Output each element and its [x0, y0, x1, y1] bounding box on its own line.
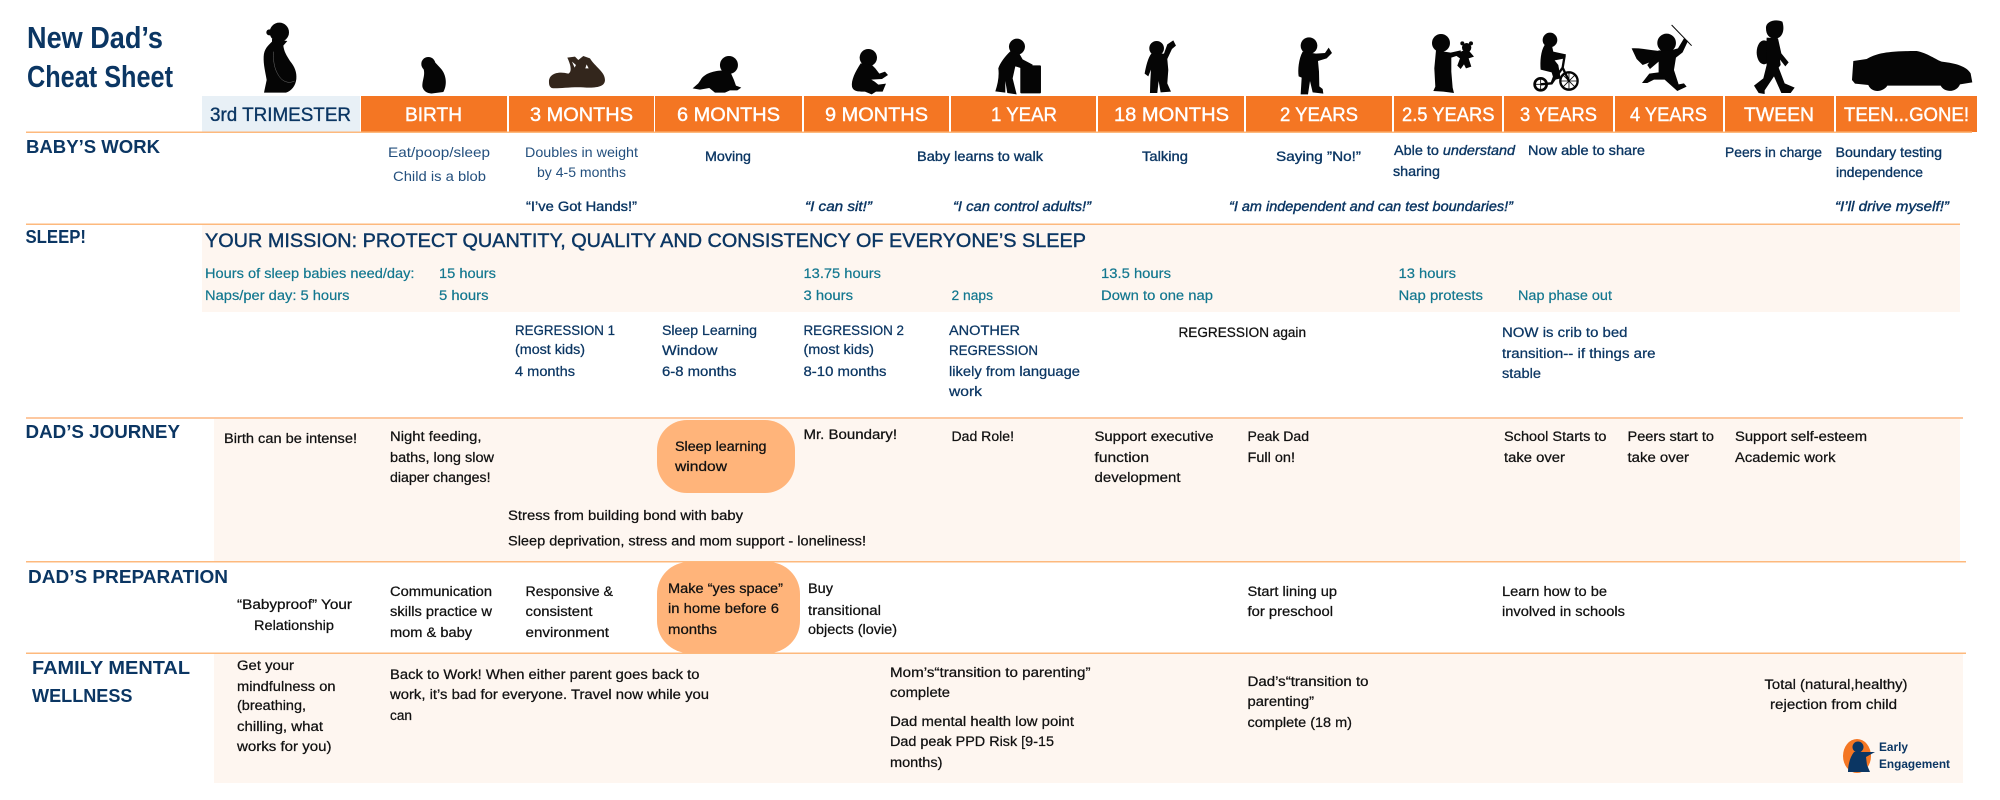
text: saying no: Saying ”No!” — [1276, 148, 1361, 164]
text: crib to bed — [1502, 325, 1656, 381]
icon: baby lying with hands up — [549, 56, 605, 88]
sleep hours table: Down to one nap — [1101, 288, 1213, 303]
quote: independent: “I am independent and can test boundaries!” — [1229, 198, 1514, 214]
text: 3 months: Doubles in weight — [525, 144, 638, 160]
text: transitional objects: Buy — [808, 581, 833, 596]
text: regression 1 — [515, 323, 615, 379]
logo: early engagement — [1843, 739, 1950, 773]
text: dad mental health: months) — [890, 755, 942, 770]
stage: birth — [361, 96, 507, 132]
heading: dad's preparation: DAD’S PREPARATION — [28, 566, 228, 587]
stage: 6 months — [655, 96, 802, 132]
stage: 3rd trimester: 3rd TRIMESTER — [210, 104, 351, 126]
text: school starts — [1504, 429, 1606, 465]
callout: yes space: months — [668, 622, 717, 637]
text: sleep learning window — [662, 323, 757, 379]
text: responsive: environment — [526, 625, 609, 640]
icon: toddler waving — [1145, 40, 1176, 93]
text: rejection — [1764, 677, 1908, 712]
text: teen independence: independence — [1836, 164, 1923, 180]
heading: baby's work: BABY’S WORK — [26, 136, 161, 157]
text: back to work: can — [390, 708, 412, 723]
text: teen independence — [1836, 144, 1942, 180]
text: responsive: Responsive & — [526, 584, 613, 599]
stage: 3 years: 3 YEARS — [1520, 104, 1597, 126]
text: another regression: REGRESSION — [949, 343, 1038, 358]
text: night feeding — [390, 429, 494, 485]
heading: sleep: SLEEP! — [26, 226, 86, 247]
text: stress and loneliness — [508, 508, 866, 548]
stage: 2 years: 2 YEARS — [1280, 104, 1358, 126]
text: regression again: REGRESSION again — [1178, 325, 1306, 340]
sleep hours table: Hours of sleep babies need/day: — [205, 266, 414, 281]
text: dad mental health: Dad peak PPD Risk [9-15 — [890, 734, 1054, 749]
stage: 3 months — [509, 96, 654, 132]
text: schools: Learn how to be — [1502, 584, 1607, 599]
sleep hours table: Naps/per day: 5 hours — [205, 288, 350, 303]
title — [27, 20, 173, 94]
stage: 9 months — [804, 96, 949, 132]
text: teen independence: Boundary testing — [1836, 144, 1942, 160]
stage: 9 months: 9 MONTHS — [825, 104, 928, 126]
stage: 3rd trimester — [202, 96, 360, 132]
heading: family mental wellness: FAMILY MENTAL — [32, 657, 190, 678]
text: rejection: Total (natural,healthy) — [1764, 677, 1908, 692]
text: mindfulness: mindfulness on — [237, 679, 336, 694]
text: mindfulness — [236, 658, 336, 754]
text: school starts: School Starts to — [1504, 429, 1606, 444]
stage: tween: TWEEN — [1744, 104, 1814, 126]
text: self-esteem: Academic work — [1735, 450, 1836, 465]
text: dad's transition: Dad’s“transition to — [1248, 674, 1368, 689]
text: dad's transition: parenting” — [1248, 694, 1314, 709]
text: executive function — [1094, 429, 1214, 485]
text: moving: Moving — [705, 148, 751, 164]
text: babyproof: “Babyproof” Your — [237, 597, 353, 612]
callout: sleep learning window: window — [674, 459, 727, 474]
text: regression 1: 4 months — [515, 364, 575, 379]
icon: newborn — [421, 57, 446, 93]
icon: two-year-old waving — [1298, 37, 1332, 94]
text: back to work: work, it’s bad for everyone. Travel now while you — [389, 687, 709, 702]
sleep hours table: 13.5 hours — [1101, 266, 1171, 281]
quote: sit: “I can sit!” — [805, 198, 873, 214]
text: crib to bed: NOW is crib to bed — [1502, 325, 1628, 340]
text: another regression: likely from language — [949, 364, 1080, 379]
text: rejection: rejection from child — [1770, 697, 1897, 712]
sleep hours table: Nap phase out — [1518, 288, 1612, 303]
text: mindfulness: works for you) — [236, 739, 332, 754]
text: understand sharing: Able to understand — [1394, 142, 1516, 158]
text: another regression — [948, 323, 1080, 399]
text: regression 2: 8-10 months — [804, 364, 887, 379]
stage: 18 months — [1098, 96, 1244, 132]
stage: 4 years — [1615, 96, 1723, 132]
stage: 2 years — [1246, 96, 1392, 132]
panel: dad's preparation — [28, 562, 1625, 653]
text: executive function: function — [1094, 450, 1149, 465]
panel: baby's work — [26, 136, 1950, 214]
mission statement: YOUR MISSION: PROTECT QUANTITY, QUALITY AND CONSISTENCY OF EVERYONE’S SLEEP — [205, 230, 1086, 252]
text: sleep learning window: Window — [662, 343, 718, 358]
stage: 6 months: 6 MONTHS — [677, 104, 780, 126]
stage: 2.5 years: 2.5 YEARS — [1402, 104, 1494, 126]
text: responsive — [526, 584, 613, 640]
text: mr boundary: Mr. Boundary! — [804, 427, 897, 442]
text: regression 1: REGRESSION 1 — [515, 323, 615, 338]
panel: sleep — [26, 225, 1960, 399]
text: another regression: work — [948, 384, 982, 399]
stage: teen — [1836, 96, 1977, 132]
panel: family mental wellness — [32, 654, 1963, 783]
text: schools: involved in schools — [1502, 604, 1625, 619]
text: peak dad — [1248, 429, 1309, 465]
icon: running child with cape — [1632, 25, 1692, 91]
text: preschool — [1248, 584, 1337, 619]
text: peak dad: Peak Dad — [1248, 429, 1309, 444]
title: New Dad’s — [27, 20, 163, 55]
text: schools — [1502, 584, 1625, 619]
text: communication: Communication — [390, 584, 492, 599]
icon: tween with backpack — [1754, 20, 1795, 94]
sleep hours table: 5 hours — [439, 288, 489, 303]
quote: control adults: “I can control adults!” — [953, 198, 1092, 214]
text: regression 1: (most kids) — [515, 342, 585, 357]
icon: child with teddy — [1432, 34, 1474, 93]
text: responsive: consistent — [526, 604, 593, 619]
sleep hours table — [205, 266, 1612, 303]
text: back to work — [389, 667, 709, 723]
text: mindfulness: chilling, what — [237, 719, 323, 734]
text: dad role: Dad Role! — [952, 429, 1014, 444]
text: babyproof: Relationship — [254, 618, 334, 633]
text: preschool: Start lining up — [1248, 584, 1337, 599]
text: executive function: Support executive — [1094, 429, 1214, 444]
text: communication: mom & baby — [390, 625, 472, 640]
heading: family mental wellness: WELLNESS — [32, 685, 132, 706]
quote: drive: “I’ll drive myself!” — [1835, 198, 1950, 214]
stage: 3 months: 3 MONTHS — [530, 104, 633, 126]
icon: sitting baby — [852, 49, 888, 94]
text: dad mental health: Dad mental health low point — [890, 714, 1074, 729]
text: babyproof — [237, 597, 353, 633]
text: regression 2: (most kids) — [804, 342, 874, 357]
text: another regression: ANOTHER — [949, 323, 1020, 338]
text: communication — [390, 584, 492, 640]
text: self-esteem — [1735, 429, 1867, 465]
callout: yes space — [657, 562, 800, 653]
text: understand sharing: sharing — [1393, 163, 1440, 179]
text: mom's transition — [890, 665, 1090, 700]
heading: family mental wellness — [32, 657, 190, 706]
text: regression 2 — [804, 323, 904, 379]
sleep hours table: Nap protests — [1398, 288, 1483, 303]
stage: 3 years — [1504, 96, 1613, 132]
sleep hours table: 2 naps — [952, 288, 993, 303]
text: peers — [1628, 429, 1714, 465]
text: stress and loneliness: Sleep deprivation, stress and mom support - loneliness! — [508, 534, 866, 548]
sleep hours table: 3 hours — [804, 288, 853, 303]
stage: 4 years: 4 YEARS — [1630, 104, 1707, 126]
text: peers: Peers start to — [1628, 429, 1714, 444]
text: communication: skills practice w — [390, 604, 492, 619]
heading: dad's journey: DAD’S JOURNEY — [26, 421, 181, 442]
text: dad mental health — [890, 714, 1074, 770]
text: night feeding: Night feeding, — [390, 429, 482, 444]
text: night feeding: baths, long slow — [390, 450, 494, 465]
stage: 1 year: 1 YEAR — [991, 104, 1057, 126]
silhouette row: life stages — [264, 20, 1972, 94]
text: crib to bed: stable — [1502, 366, 1541, 381]
text: executive function: development — [1094, 470, 1181, 485]
text: school starts: take over — [1504, 450, 1566, 465]
title: Cheat Sheet — [27, 59, 173, 94]
text: talking: Talking — [1142, 148, 1188, 164]
stage: tween — [1725, 96, 1834, 132]
callout: sleep learning window: Sleep learning — [675, 439, 766, 454]
text: preschool: for preschool — [1248, 604, 1333, 619]
timeline header bar — [202, 96, 1977, 132]
stage: teen: TEEN...GONE! — [1844, 104, 1969, 126]
text: able to share: Now able to share — [1528, 142, 1645, 158]
text: walk: Baby learns to walk — [917, 148, 1044, 164]
text: mom's transition: complete — [890, 685, 950, 700]
text: transitional objects — [808, 581, 897, 637]
callout: sleep learning window — [657, 420, 795, 493]
text: night feeding: diaper changes! — [390, 470, 490, 485]
icon: pregnant woman — [264, 23, 296, 93]
callout: yes space: Make “yes space” — [668, 581, 783, 596]
text: peers: Peers in charge — [1725, 144, 1822, 160]
callout: yes space: in home before 6 — [668, 601, 779, 616]
icon: crawling baby — [693, 56, 741, 93]
text: mom's transition: Mom’s“transition to parenting” — [890, 665, 1090, 680]
text: transitional objects: objects (lovie) — [808, 622, 897, 637]
text: birth intense: Birth can be intense! — [224, 431, 357, 446]
text: self-esteem: Support self-esteem — [1735, 429, 1867, 444]
text: 3 months — [525, 144, 638, 180]
text: birth: Child is a blob — [393, 168, 486, 184]
text: dad's transition — [1248, 674, 1368, 730]
logo: early engagement: Early — [1879, 742, 1909, 754]
sleep hours table: 13 hours — [1398, 266, 1456, 281]
text: mindfulness: (breathing, — [237, 698, 306, 713]
icon: child on bike — [1535, 33, 1578, 90]
text: understand sharing — [1393, 142, 1516, 179]
stage: 18 months: 18 MONTHS — [1114, 104, 1229, 126]
sleep hours table: 15 hours — [439, 266, 496, 281]
text: sleep learning window: 6-8 months — [662, 364, 737, 379]
stage: 1 year — [951, 96, 1096, 132]
text: mindfulness: Get your — [237, 658, 295, 673]
logo: early engagement: Engagement — [1879, 759, 1950, 771]
text: birth — [388, 144, 490, 184]
text: stress and loneliness: Stress from building bond with baby — [508, 508, 743, 523]
panel: dad's journey — [26, 419, 1960, 561]
text: peers: take over — [1628, 450, 1690, 465]
quote: hands: “I’ve Got Hands!” — [526, 198, 637, 214]
text: birth: Eat/poop/sleep — [388, 144, 490, 160]
text: crib to bed: transition-- if things are — [1502, 346, 1656, 361]
icon: standing baby at box — [995, 39, 1041, 94]
stage: birth: BIRTH — [405, 104, 462, 126]
text: back to work: Back to Work! When either parent goes back to — [390, 667, 700, 682]
text: transitional objects: transitional — [808, 603, 881, 618]
sleep hours table: 13.75 hours — [804, 266, 881, 281]
text: dad's transition: complete (18 m) — [1248, 715, 1352, 730]
text: 3 months: by 4-5 months — [537, 164, 626, 180]
stage: 2.5 years — [1394, 96, 1502, 132]
icon: car — [1852, 51, 1972, 91]
text: sleep learning window: Sleep Learning — [662, 323, 757, 338]
text: peak dad: Full on! — [1248, 450, 1295, 465]
text: regression 2: REGRESSION 2 — [804, 323, 904, 338]
